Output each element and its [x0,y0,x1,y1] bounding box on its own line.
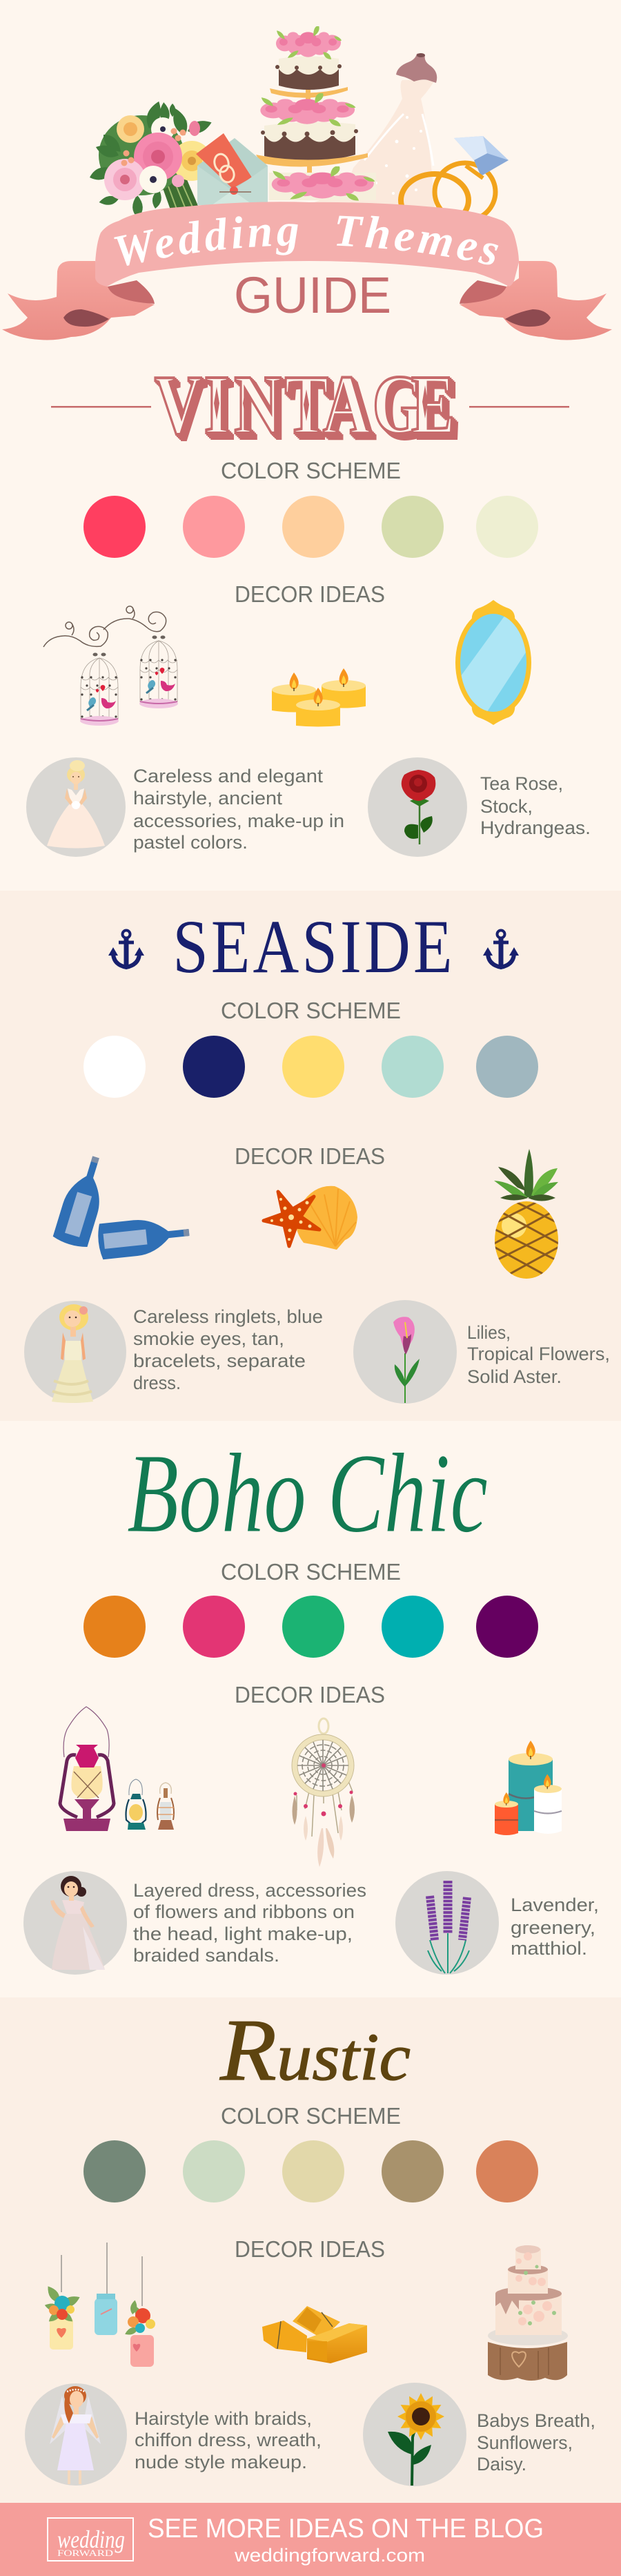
description: bride style: Careless and elegant [133,766,324,786]
title: VINTAGE with side rules: VINTAGE [155,358,455,452]
heading: decor ideas: DECOR IDEAS [235,1143,385,1169]
bride portrait [24,1301,126,1403]
heading: color scheme: COLOR SCHEME [221,458,401,483]
description: flowers [467,1322,610,1387]
color swatches [83,1036,538,1098]
description: flowers: Daisy. [477,2454,526,2475]
icon: hanging mason jars [43,2243,155,2367]
rustic background [0,1997,621,2503]
description: bride style: braided sandals. [133,1945,279,1966]
logo: wedding forward: wedding [57,2526,125,2553]
icon: dreamcatcher [292,1718,355,1867]
icon: wedding cake [256,26,376,201]
flower portrait: sunflower [363,2383,466,2486]
description: flowers: Hydrangeas. [480,817,591,838]
description: bride style: Layered dress, accessories [133,1880,366,1901]
heading: color scheme: COLOR SCHEME [221,2103,401,2129]
icon: gold rings with diamond [401,136,509,226]
color swatches [83,1596,538,1658]
description: bride style: chiffon dress, wreath, [135,2430,322,2450]
icon: birdcages with love birds [43,606,178,726]
bride portrait [25,2383,127,2486]
bride portrait [23,1871,127,1975]
icon: anchor left [108,931,144,967]
description: bride style: hairstyle, ancient [133,788,283,808]
description: flowers: Lilies, [467,1322,511,1343]
bride portrait [26,757,126,857]
icon: lanterns [60,1707,174,1831]
icon: envelope invitation [196,133,268,205]
seaside background [0,891,621,1421]
flower portrait: calla lily [353,1300,457,1404]
panel: boho chic [23,1430,599,1975]
icon: pineapple [494,1149,558,1279]
icon: tiered cake on stump [488,2245,568,2381]
description: flowers: matthiol. [511,1938,587,1959]
panel: rustic [0,1997,621,2503]
heading: color scheme: COLOR SCHEME [221,1559,401,1585]
panel: vintage [26,358,591,857]
heading: decor ideas: DECOR IDEAS [235,2236,385,2262]
banner ribbon [2,202,612,340]
icon: oval mirror [455,600,535,725]
description: bride style: accessories, make-up in [133,811,344,831]
description: bride style [133,1880,366,1966]
description: flowers [511,1895,599,1959]
heading: decor ideas: DECOR IDEAS [235,1682,385,1707]
description: bride style: smokie eyes, tan, [133,1328,284,1349]
header illustration [88,26,509,226]
icon: bouquet of roses [88,99,213,218]
description: bride style: of flowers and ribbons on [133,1901,355,1922]
description: flowers: Stock, [480,796,533,817]
description: bride style [133,1306,323,1393]
heading: decor ideas: DECOR IDEAS [235,581,385,607]
description: bride style: Careless ringlets, blue [133,1306,323,1327]
icon: starfish and shell [264,1186,357,1250]
ribbon main band [95,202,519,287]
title: Rustic: Rustic [219,2001,411,2099]
description: flowers [477,2410,595,2475]
ribbon tail right [460,261,612,340]
panel: seaside [0,891,621,1421]
description: flowers: Tea Rose, [480,773,563,794]
description: bride style: Hairstyle with braids, [135,2408,312,2429]
logo: wedding forward [48,2518,133,2561]
heading: GUIDE: GUIDE [234,267,391,324]
icon: anchor right [483,931,519,967]
description: bride style: nude style makeup. [135,2452,307,2472]
call to action: SEE MORE IDEAS ON THE BLOG [148,2514,544,2544]
icon: tea candles [272,668,366,726]
footer bar [0,2503,621,2576]
description: flowers: Tropical Flowers, [467,1344,610,1364]
title: Boho Chic: Boho Chic [127,1430,488,1556]
description: flowers: Babys Breath, [477,2410,595,2431]
description: bride style: pastel colors. [133,832,248,853]
description: bride style [133,766,344,853]
description: bride style: the head, light make-up, [133,1924,353,1944]
color swatches [83,2140,538,2202]
description: flowers: Solid Aster. [467,1366,562,1387]
flower portrait: lavender [395,1871,499,1975]
website url: weddingforward.com [234,2545,425,2566]
heading: color scheme: COLOR SCHEME [221,998,401,1023]
icon: message bottles [52,1152,191,1260]
description: flowers: Sunflowers, [477,2432,573,2453]
title: VINTAGE with side rules [51,358,569,452]
description: flowers: greenery, [511,1917,595,1938]
icon: hay bales [262,2306,367,2363]
description: bride style [135,2408,322,2472]
heading: Wedding Themes: Wedding Themes [114,215,498,266]
color swatches [83,496,538,558]
description: flowers [480,773,591,838]
description: flowers: Lavender, [511,1895,599,1915]
description: bride style: dress. [133,1373,181,1393]
flower portrait: red rose [368,757,467,857]
title: SEASIDE: SEASIDE [172,904,455,989]
ribbon tail left [2,261,155,340]
icon: pillar candles [495,1741,562,1835]
heading: Wedding Themes [114,215,498,266]
description: bride style: bracelets, separate [133,1350,306,1371]
logo: wedding forward: FORWARD [57,2548,113,2558]
icon: wedding dress [297,53,437,207]
